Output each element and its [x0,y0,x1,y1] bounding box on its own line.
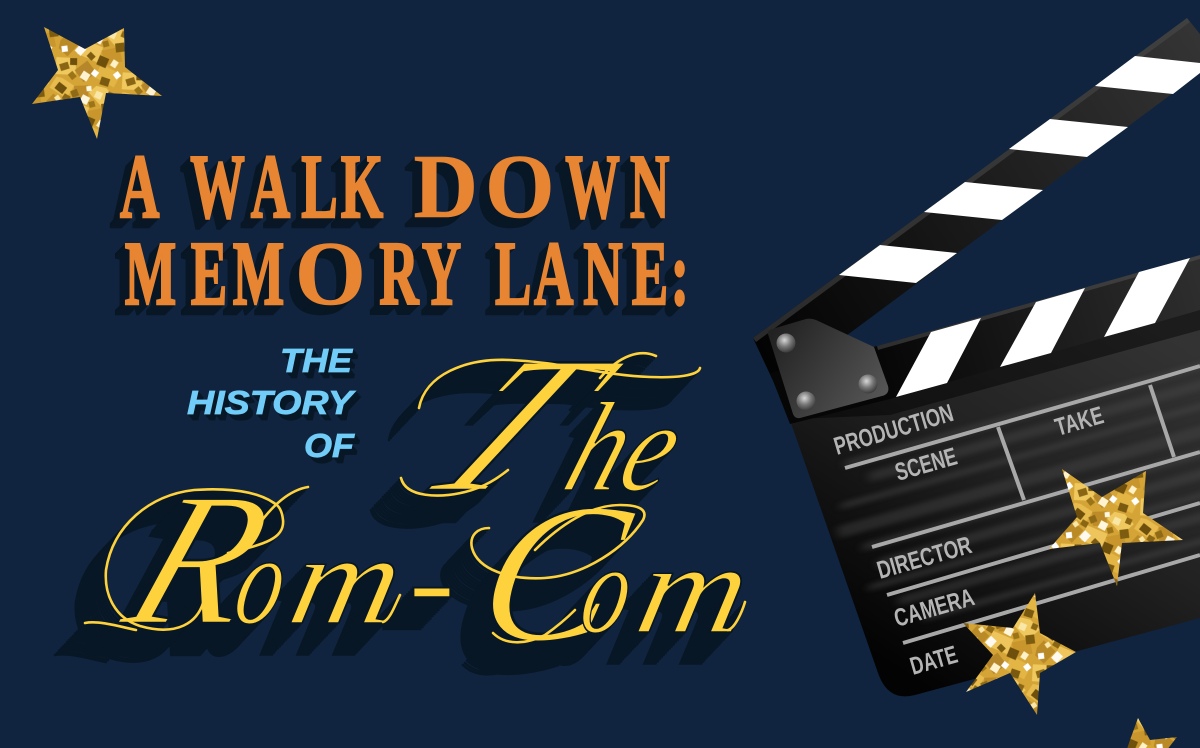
title: script The Rom-Com [85,316,762,683]
title: A Walk Down Memory Lane: MEM [125,224,284,325]
star: on board [1049,469,1183,586]
hinge plate [768,319,888,418]
star: board bottom [963,593,1076,715]
title: script The Rom-Com: R [101,454,295,665]
title: A Walk Down Memory Lane: RY LANE: [379,224,689,325]
title: script The Rom-Com: o [224,510,300,651]
board labels: CAMERA [891,583,977,633]
rivets [776,334,796,352]
subtitle: The History Of [187,342,356,464]
lower clapper stick [770,255,1200,424]
board lines [845,366,1200,643]
title: A Walk Down Memory Lane: WN [565,137,669,238]
title: script The Rom-Com: - [408,507,456,652]
title: A Walk Down Memory Lane: A WALK [120,137,383,238]
star: top left [32,27,162,139]
brushed streaks [836,372,1200,621]
star: bottom right corner [1125,718,1177,748]
clapperboard [753,18,1200,696]
board labels: TAKE [1052,401,1107,442]
title: A Walk Down Memory Lane: DO [414,137,554,237]
subtitle: The History Of: OF [304,427,355,464]
board labels: DIRECTOR [874,531,975,585]
stripes [896,258,1190,397]
shadow under stick [816,310,1200,418]
title: A Walk Down Memory Lane [120,137,689,325]
title: script The Rom-Com: he [550,376,701,518]
subtitle: The History Of: THE [280,342,353,379]
title: script The Rom-Com: m [279,510,415,651]
board labels: DATE [907,641,961,681]
board labels [831,399,1107,681]
title: script The Rom-Com: m [626,519,762,660]
board labels: PRODUCTION [831,399,957,461]
stripes [839,56,1200,283]
title: A Walk Down Memory Lane: O [295,223,366,324]
title: script The Rom-Com: T [378,316,661,532]
subtitle: The History Of: HISTORY [187,384,356,421]
title: script The Rom-Com: o [570,519,646,660]
board labels: SCENE [892,442,960,487]
top clapper stick [753,18,1200,385]
title: script The Rom-Com: C [459,462,650,683]
board body [791,310,1200,696]
